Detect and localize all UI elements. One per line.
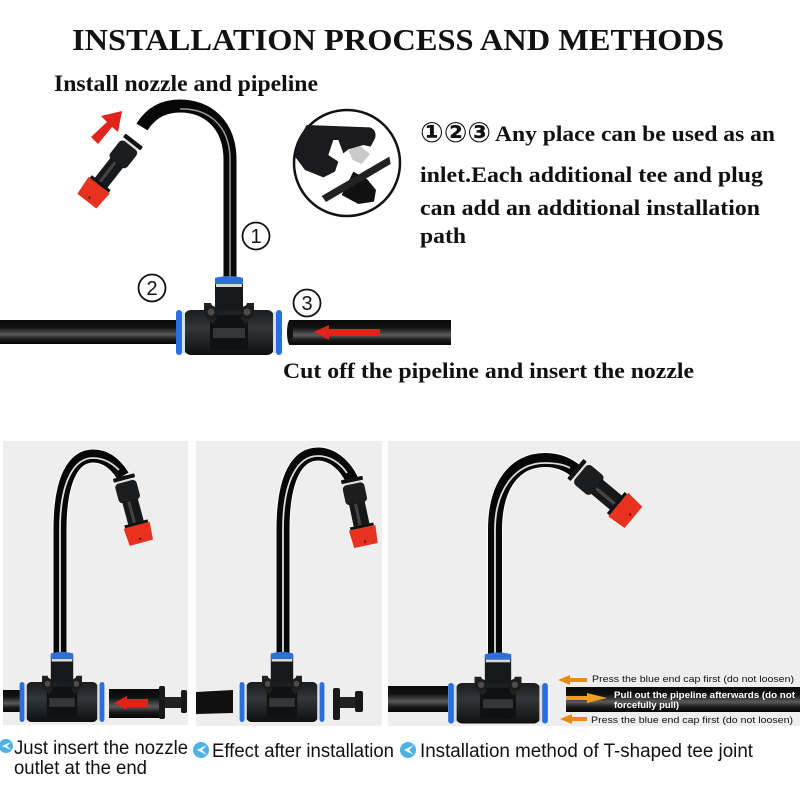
panel: T-shaped tee joint method [388,441,800,726]
nozzle with red cap [76,132,145,209]
middle orange arrow [566,693,607,703]
number 3 [294,290,320,316]
end plug [109,686,187,719]
icon: blue arrow badge [0,739,13,753]
caption text: outlet at the end [14,758,147,779]
left horizontal pipe [0,320,178,344]
left pipe [388,686,448,712]
tee joint [240,652,324,722]
caption: installation method [400,741,754,762]
number 1: 1 [250,226,262,248]
caption text: Effect after installation [212,741,394,762]
text block: inlet explanation: ①②③ [420,118,491,149]
panel: effect after installation [196,441,382,726]
caption text: Just insert the nozzle [14,738,188,759]
text block: inlet explanation: path [420,223,466,248]
curved pipe [60,456,123,655]
note: press the blue end cap top: Press the blue end cap first (do not loosen) [592,674,794,685]
top orange arrow [558,675,587,685]
red arrow [114,696,148,710]
caption: just insert the nozzle [0,738,188,779]
icon: blue arrow badge [400,742,416,758]
note: pull out the pipeline: forcefully pull) [614,700,679,711]
caption: cut off the pipeline: Cut off the pipeline and insert the nozzle [283,358,694,383]
note: pull out the pipeline: Pull out the pipeline afterwards (do not [614,690,796,701]
left pipe [196,690,233,714]
right cut pipe [287,320,451,345]
icon: blue arrow badge [193,742,209,758]
nozzle [565,457,643,529]
pulled out pipe [566,687,800,712]
left pipe stub [3,690,20,712]
nozzle [110,473,154,546]
diagram: main tee joint with nozzle and pipes [0,106,451,355]
number 2 [138,274,166,302]
curved pipe [495,460,577,655]
panel: just insert the nozzle [3,441,188,725]
tee joint [448,652,548,724]
caption: effect after installation [193,741,394,762]
icon: pipe cutter in circle [294,110,400,216]
number 3: 3 [301,293,313,315]
end plug [333,688,363,720]
nozzle [338,475,379,548]
note: pull out the pipeline [614,690,796,711]
text block: inlet explanation: can add an additional installation [420,195,760,220]
title: INSTALLATION PROCESS AND METHODS [72,22,724,57]
curved pipe [283,454,352,655]
red arrow into the tee [314,325,380,340]
tee joint [176,276,282,355]
heading: install nozzle and pipeline: Install nozzle and pipeline [54,71,318,96]
bottom orange arrow [560,714,587,724]
number 1 [242,222,270,250]
tee joint [20,652,104,722]
red arrow up to the pipe [91,111,122,144]
note: press the blue end cap bottom: Press the blue end cap first (do not loosen) [591,715,793,726]
caption text: Installation method of T-shaped tee joint [420,741,754,762]
text block: inlet explanation: inlet.Each additional tee and plug [420,162,763,187]
number 2: 2 [146,278,158,300]
text block: inlet explanation [420,118,775,248]
text block: inlet explanation: Any place can be used as an [495,121,775,146]
curved riser pipe [142,106,230,280]
caption text [14,738,188,779]
